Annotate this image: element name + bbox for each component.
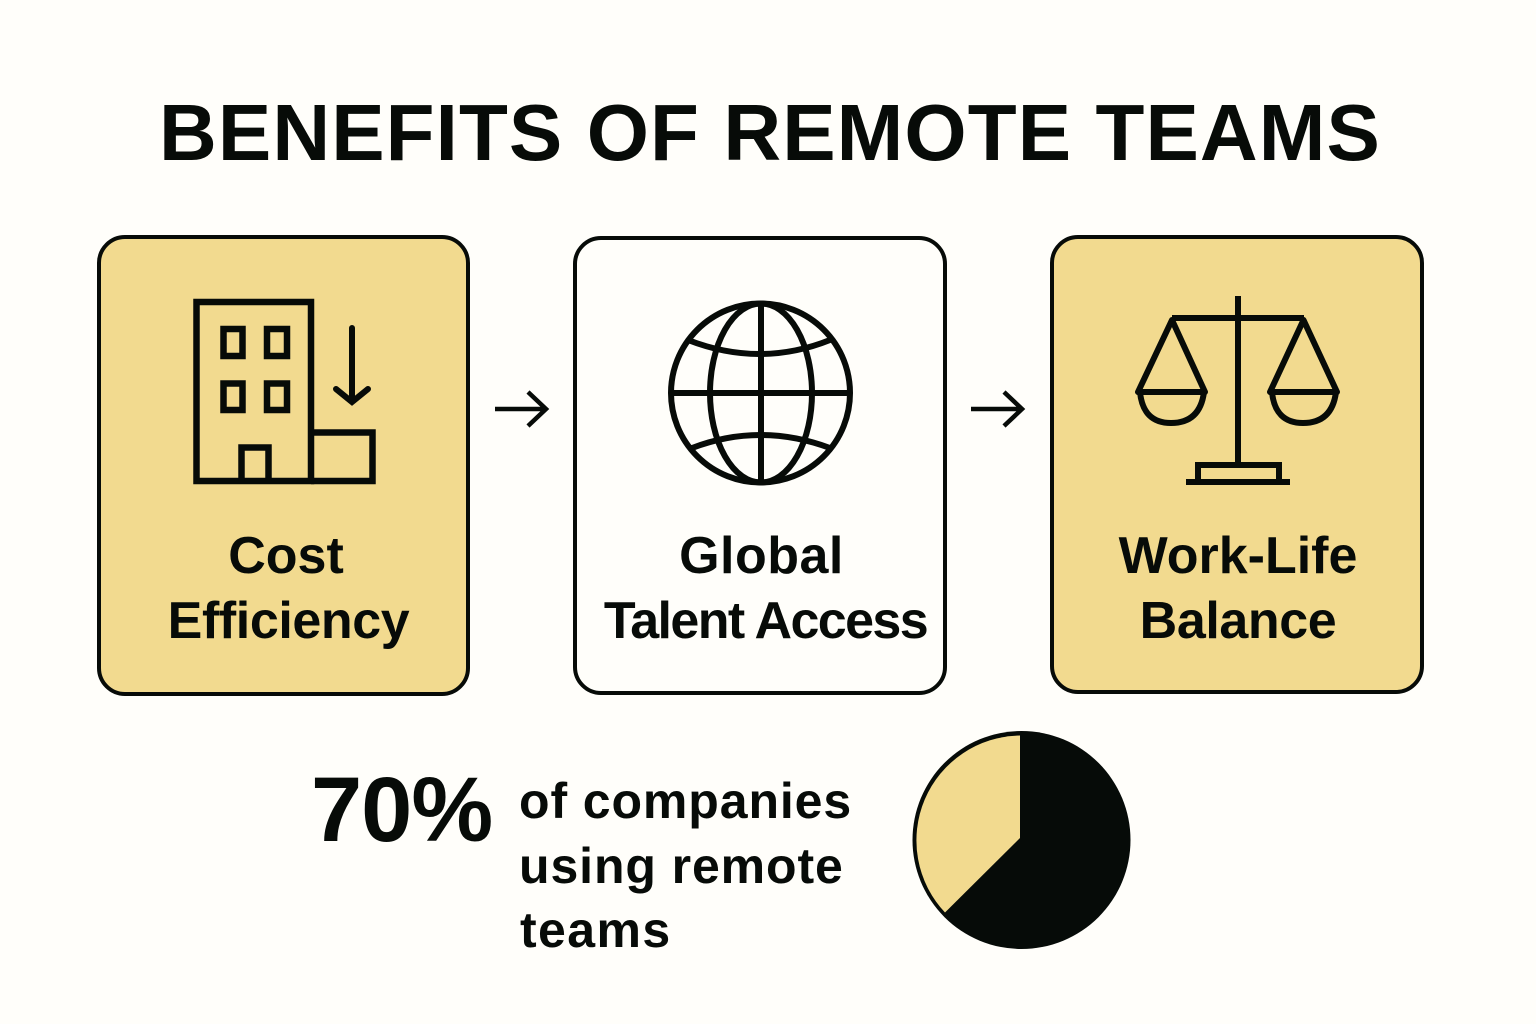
label: cost efficiency xyxy=(168,527,410,650)
label: global talent access: Global xyxy=(679,527,844,585)
label: global talent access: Talent Access xyxy=(604,592,927,650)
label: global talent access xyxy=(604,527,927,650)
statistic: 70%: 70% xyxy=(311,759,492,861)
icon: office building with down arrow xyxy=(193,298,376,484)
statistic description xyxy=(519,773,852,958)
label: work-life balance: Balance xyxy=(1140,592,1336,650)
label: work-life balance xyxy=(1118,527,1357,650)
label: cost efficiency: Cost xyxy=(228,527,344,585)
statistic description: using remote xyxy=(519,838,844,894)
statistic description: teams xyxy=(520,902,672,958)
arrow: first xyxy=(495,390,550,428)
panel: cost efficiency xyxy=(97,235,470,696)
statistic description: of companies xyxy=(519,773,852,829)
label: cost efficiency: Efficiency xyxy=(168,592,409,650)
arrow: second xyxy=(971,390,1026,428)
pie chart xyxy=(912,731,1130,949)
panel: work-life balance xyxy=(1050,235,1424,694)
icon: globe xyxy=(668,300,853,486)
title: BENEFITS OF REMOTE TEAMS xyxy=(159,88,1381,177)
label: work-life balance: Work-Life xyxy=(1119,527,1357,585)
panel: global talent access xyxy=(573,236,947,695)
icon: balance scales xyxy=(1135,296,1340,485)
